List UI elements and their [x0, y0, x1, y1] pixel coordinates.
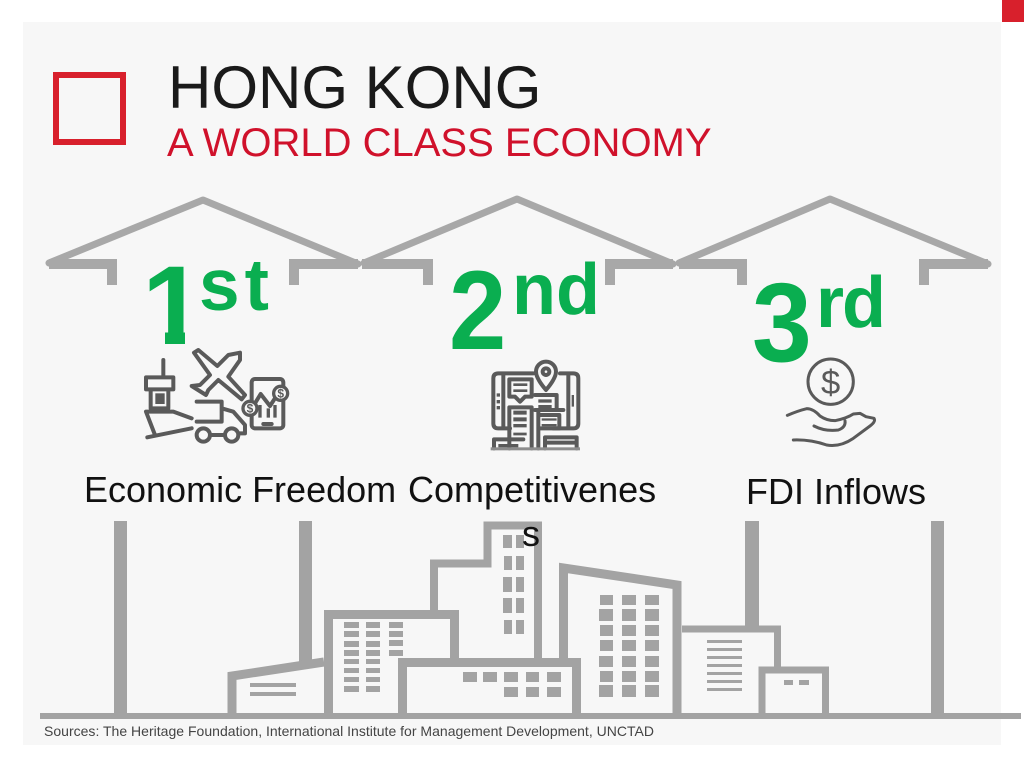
ranking 3rd: rd	[816, 263, 884, 343]
icon: coin over open hand	[787, 359, 874, 445]
sources: Sources: The Heritage Foundation, International Institute for Management Development, UNCTAD	[44, 723, 654, 739]
label: Competitiveness: Competitivenes	[408, 469, 656, 510]
ranking 1st: 1	[142, 243, 204, 368]
logo square	[56, 75, 123, 142]
icon: trade and finance: $	[247, 402, 254, 416]
corner accent	[1002, 0, 1024, 22]
title: HONG KONG	[168, 54, 541, 121]
icon: city map on monitor	[491, 362, 580, 450]
building E	[564, 568, 677, 716]
ranking 3rd	[752, 261, 884, 385]
building B	[328, 614, 454, 716]
subtitle: A WORLD CLASS ECONOMY	[167, 121, 712, 165]
label: Economic Freedom: Economic Freedom	[84, 469, 396, 510]
ranking 2nd	[449, 248, 600, 373]
label: Competitiveness: s	[522, 513, 540, 554]
roofs	[49, 199, 988, 285]
ranking 2nd: nd	[512, 250, 600, 330]
ranking 2nd: 2	[449, 248, 506, 373]
building D	[402, 662, 576, 716]
ground line	[40, 713, 1021, 719]
icon: coin over open hand: $	[821, 364, 840, 402]
building A	[232, 662, 324, 716]
building G	[762, 670, 826, 716]
building F	[682, 629, 778, 691]
skyline	[40, 521, 1021, 719]
icon: trade and finance: $	[277, 387, 284, 401]
columns	[114, 521, 944, 716]
icon: trade and finance	[146, 350, 288, 442]
ranking 3rd: 3	[752, 261, 812, 385]
ranking 1st: st	[199, 245, 274, 326]
label: FDI Inflows: FDI Inflows	[746, 471, 926, 512]
building C tower	[434, 526, 538, 662]
label: Competitiveness	[408, 469, 656, 554]
ranking 1st	[150, 262, 268, 344]
